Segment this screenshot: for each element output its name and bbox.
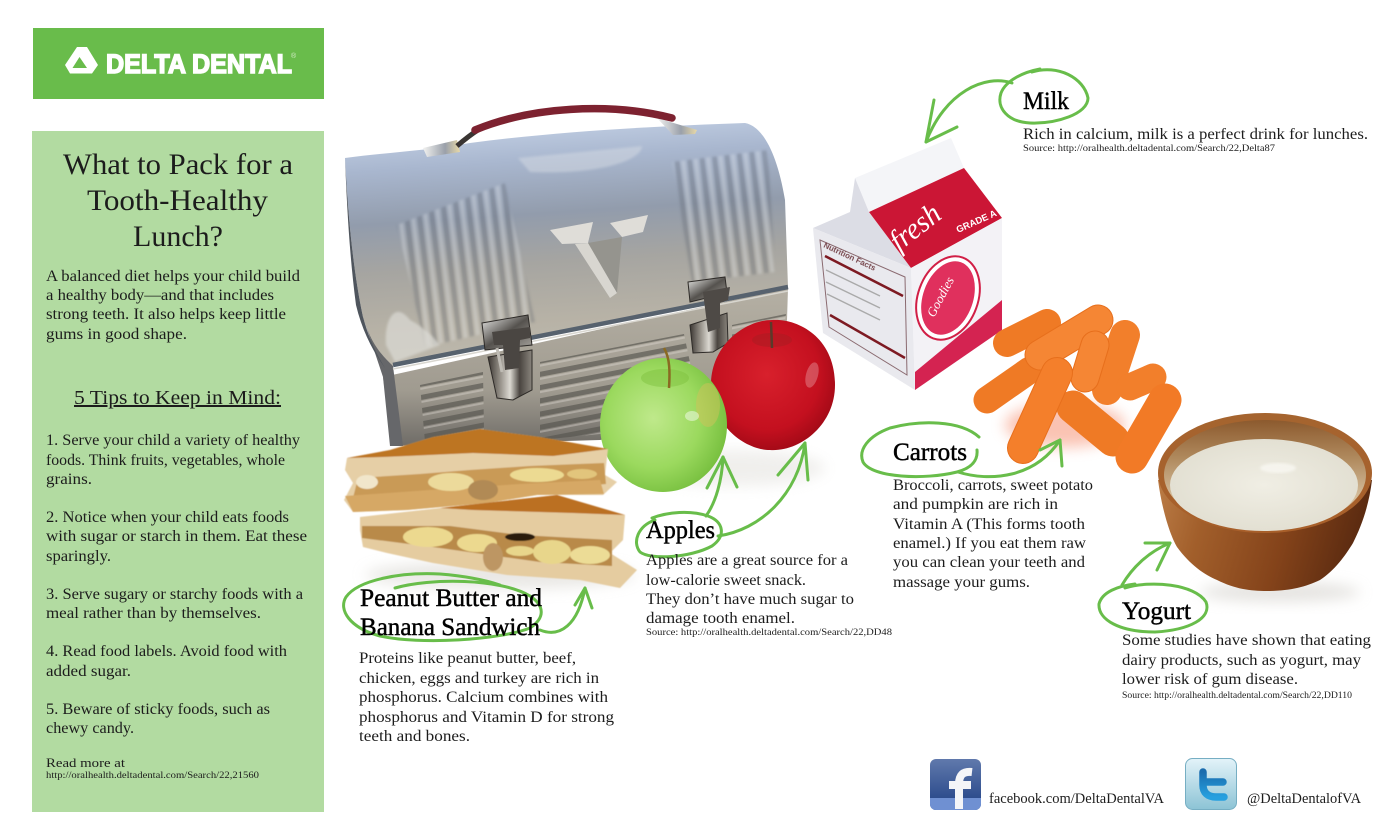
carton front face — [911, 218, 1002, 390]
tip 1: foods. Think fruits, vegetables, whole — [46, 452, 285, 469]
intro text: A balanced diet helps your child build — [46, 268, 300, 285]
facebook handle: facebook.com/DeltaDentalVA — [989, 791, 1165, 807]
carrots scribble and arrow — [862, 423, 1062, 477]
carton gable — [855, 138, 964, 212]
read more link: http://oralhealth.deltadental.com/Search/22,21560 — [46, 771, 259, 781]
callout: sandwich — [344, 574, 614, 745]
lunchbox side band — [363, 317, 403, 446]
yogurt text: dairy products, such as yogurt, may — [1122, 652, 1361, 669]
read more link: Read more at — [46, 755, 125, 770]
sandwich text: phosphorus. Calcium combines with — [359, 689, 608, 706]
carrots text: Broccoli, carrots, sweet potato — [893, 477, 1093, 494]
intro text: gums in good shape. — [46, 326, 187, 343]
icon: milk carton — [813, 138, 1002, 390]
sandwich text: Proteins like peanut butter, beef, — [359, 650, 576, 667]
yogurt heading: Yogurt — [1122, 598, 1191, 625]
milk text: Rich in calcium, milk is a perfect drink for lunches. — [1023, 126, 1368, 143]
sandwich heading: Peanut Butter and — [360, 585, 542, 612]
left latch — [482, 315, 532, 400]
callout: apples — [636, 443, 892, 638]
yogurt surface — [1170, 439, 1358, 531]
carton fresh lettering: fresh — [883, 197, 947, 258]
icon: yogurt bowl — [1158, 413, 1372, 602]
nutrition panel — [820, 240, 907, 375]
yogurt text — [1122, 632, 1371, 688]
milk source: Source: http://oralhealth.deltadental.com/Search/22,Delta87 — [1023, 144, 1275, 154]
carrots heading: Carrots — [893, 439, 967, 466]
sandwich scribble and arrow — [344, 574, 592, 641]
carrots text: massage your gums. — [893, 574, 1030, 591]
lid seam — [393, 287, 788, 365]
carton side face — [813, 228, 915, 390]
tip 2 — [46, 509, 307, 565]
apples scribble and arrows — [636, 443, 808, 557]
shadow under sandwich — [365, 561, 635, 589]
carrots text: you can clean your teeth and — [893, 554, 1085, 571]
apples text: They don’t have much sugar to — [646, 591, 854, 608]
sandwich text — [359, 650, 614, 745]
callout: yogurt — [1099, 543, 1371, 701]
title: What to Pack for a — [63, 148, 293, 181]
carton logo circle: Goodies — [923, 274, 957, 319]
yogurt scribble and arrow — [1099, 543, 1207, 632]
social: facebook — [930, 759, 1165, 810]
carton grade label: GRADE A — [955, 208, 999, 236]
lunchbox base ribs right — [732, 314, 786, 372]
intro text: strong teeth. It also helps keep little — [46, 306, 286, 323]
carrots text: Vitamin A (This forms tooth — [893, 516, 1085, 533]
logo banner — [33, 28, 324, 99]
tip 5: 5. Beware of sticky foods, such as — [46, 701, 270, 718]
tip 2: with sugar or starch in them. Eat these — [46, 528, 307, 545]
lunchbox handle — [423, 109, 697, 157]
logo wordmark: DELTA DENTAL — [106, 49, 292, 79]
twitter handle: @DeltaDentalofVA — [1247, 791, 1362, 807]
callout: carrots — [862, 423, 1093, 591]
read more link — [46, 755, 259, 781]
carton red band — [869, 168, 1002, 268]
shadow under apples — [645, 450, 825, 486]
icon: twitter — [1186, 758, 1236, 810]
tip 1: grains. — [46, 471, 92, 488]
lunchbox illustration — [345, 109, 788, 446]
apples text: damage tooth enamel. — [646, 610, 795, 627]
icon: carrots — [987, 320, 1165, 457]
milk scribble and arrow — [926, 69, 1088, 142]
intro text — [46, 268, 300, 343]
tip 5 — [46, 701, 270, 737]
carrots text — [893, 477, 1093, 591]
tip 5: chewy candy. — [46, 720, 134, 737]
lunchbox base ribs left — [420, 372, 484, 442]
sandwich heading: Banana Sandwich — [360, 614, 540, 641]
right latch — [688, 277, 730, 353]
icon: facebook — [930, 759, 981, 810]
tip 4: added sugar. — [46, 663, 131, 680]
apples text — [646, 552, 854, 627]
icon: sandwich — [344, 429, 637, 588]
registered mark: ® — [291, 52, 297, 60]
lid scuffs — [386, 312, 440, 362]
lunchbox base ribs middle — [540, 334, 700, 440]
yogurt text: Some studies have shown that eating — [1122, 632, 1371, 649]
icon: delta triangle — [65, 47, 98, 74]
tips heading: 5 Tips to Keep in Mind: — [74, 387, 281, 409]
title: Tooth-Healthy — [87, 184, 268, 217]
tip 3: 3. Serve sugary or starchy foods with a — [46, 586, 303, 603]
tip 4 — [46, 643, 287, 680]
carrots text: and pumpkin are rich in — [893, 496, 1058, 513]
tip 1 — [46, 432, 300, 488]
emblem — [550, 215, 648, 298]
panel: tips sidebar — [32, 131, 324, 812]
tip 2: sparingly. — [46, 548, 111, 565]
lid ribs left — [397, 183, 535, 347]
icon: red apple — [711, 320, 835, 450]
title: Lunch? — [133, 220, 223, 253]
sandwich upper half — [344, 429, 617, 512]
apples text: low-calorie sweet snack. — [646, 572, 806, 589]
tip 4: 4. Read food labels. Avoid food with — [46, 643, 287, 660]
sandwich heading — [360, 585, 542, 641]
tip 3: meal rather than by themselves. — [46, 605, 261, 622]
lid ribs right — [672, 150, 775, 282]
carrots text: enamel.) If you eat them raw — [893, 535, 1086, 552]
sandwich text: phosphorus and Vitamin D for strong — [359, 709, 614, 726]
lunchbox base — [383, 288, 788, 446]
social: twitter — [1186, 758, 1362, 810]
bowl rim — [1158, 413, 1372, 533]
tip 3 — [46, 586, 303, 622]
apples heading: Apples — [646, 517, 715, 544]
milk heading: Milk — [1023, 88, 1069, 115]
carton bottom band — [915, 300, 1002, 390]
apples source: Source: http://oralhealth.deltadental.com/Search/22,DD48 — [646, 628, 892, 638]
sandwich lower half — [360, 495, 637, 588]
icon: green apple — [600, 348, 727, 492]
title — [63, 148, 293, 253]
sandwich text: teeth and bones. — [359, 728, 470, 745]
sandwich text: chicken, eggs and turkey are rich in — [359, 670, 599, 687]
bowl inner wall — [1164, 420, 1366, 530]
yogurt source: Source: http://oralhealth.deltadental.com/Search/22,DD110 — [1122, 691, 1352, 701]
lunchbox lid — [345, 123, 788, 366]
tip 1: 1. Serve your child a variety of healthy — [46, 432, 300, 449]
nutrition panel: Nutrition Facts — [822, 241, 878, 273]
apples text: Apples are a great source for a — [646, 552, 848, 569]
carton logo circle — [905, 247, 991, 349]
tip 2: 2. Notice when your child eats foods — [46, 509, 289, 526]
intro text: a healthy body—and that includes — [46, 287, 274, 304]
callout: milk — [926, 69, 1368, 154]
yogurt text: lower risk of gum disease. — [1122, 671, 1298, 688]
